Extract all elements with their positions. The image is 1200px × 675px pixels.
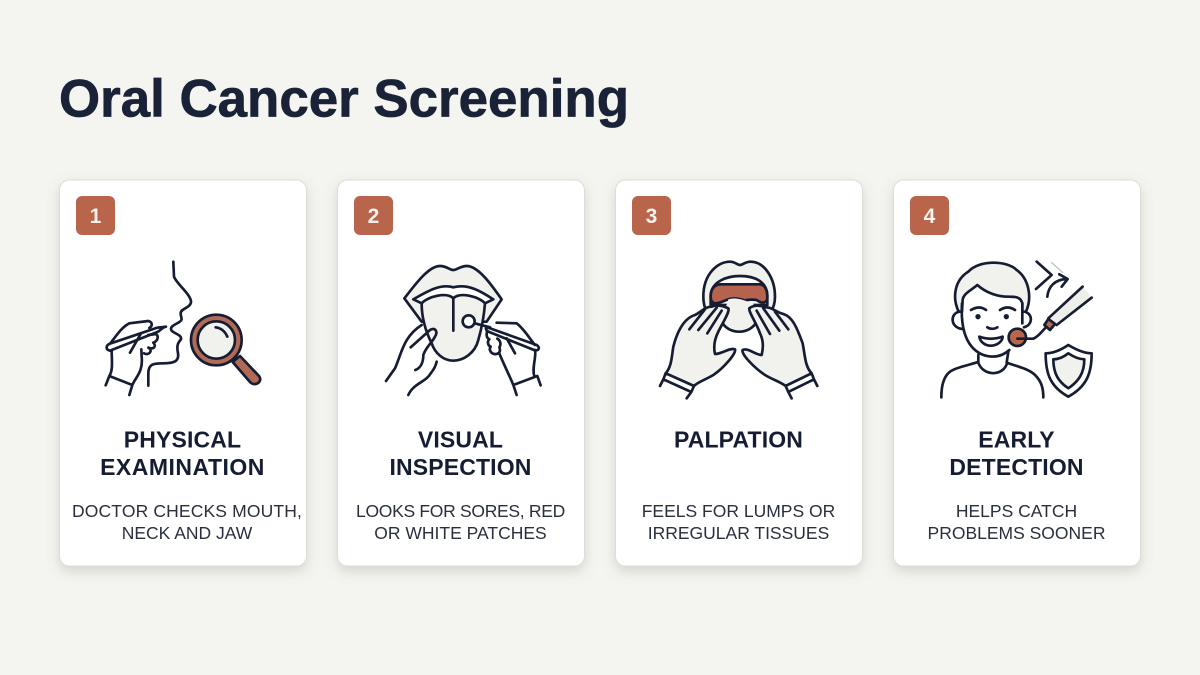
description: DOCTOR CHECKS MOUTH,: [72, 501, 302, 521]
panel: palpation: [616, 180, 862, 566]
badge 4: [910, 196, 949, 235]
heading: INSPECTION: [389, 454, 532, 480]
heading: VISUAL: [418, 426, 503, 452]
icon: lips, tongue and hands: [386, 266, 541, 395]
heading: PALPATION: [674, 426, 803, 452]
badge 3: 3: [646, 205, 657, 228]
heading: EXAMINATION: [100, 454, 265, 480]
panel: visual inspection: [338, 180, 584, 566]
description: OR WHITE PATCHES: [374, 523, 547, 543]
description: PROBLEMS SOONER: [928, 523, 1105, 543]
panel: physical examination: [60, 180, 306, 566]
badge 3: [632, 196, 671, 235]
badge 4: 4: [924, 205, 936, 228]
description: IRREGULAR TISSUES: [648, 523, 829, 543]
heading: PHYSICAL: [124, 426, 241, 452]
badge 2: 2: [368, 205, 379, 228]
badge 2: [354, 196, 393, 235]
heading: EARLY: [978, 426, 1055, 452]
description: FEELS FOR LUMPS OR: [642, 501, 835, 521]
description: LOOKS FOR SORES, RED: [356, 501, 565, 521]
description: HELPS CATCH: [956, 501, 1077, 521]
panel: early detection: [894, 180, 1140, 566]
description: NECK AND JAW: [122, 523, 253, 543]
icon: hand, face profile and magnifying glass: [106, 262, 260, 395]
badge 1: [76, 196, 115, 235]
icon: smiling patient, screening tool and shield: [941, 262, 1092, 397]
title: Oral Cancer Screening: [59, 70, 629, 128]
badge 1: 1: [90, 205, 102, 228]
icon: open mouth and gloved hands: [660, 262, 817, 398]
heading: DETECTION: [949, 454, 1084, 480]
